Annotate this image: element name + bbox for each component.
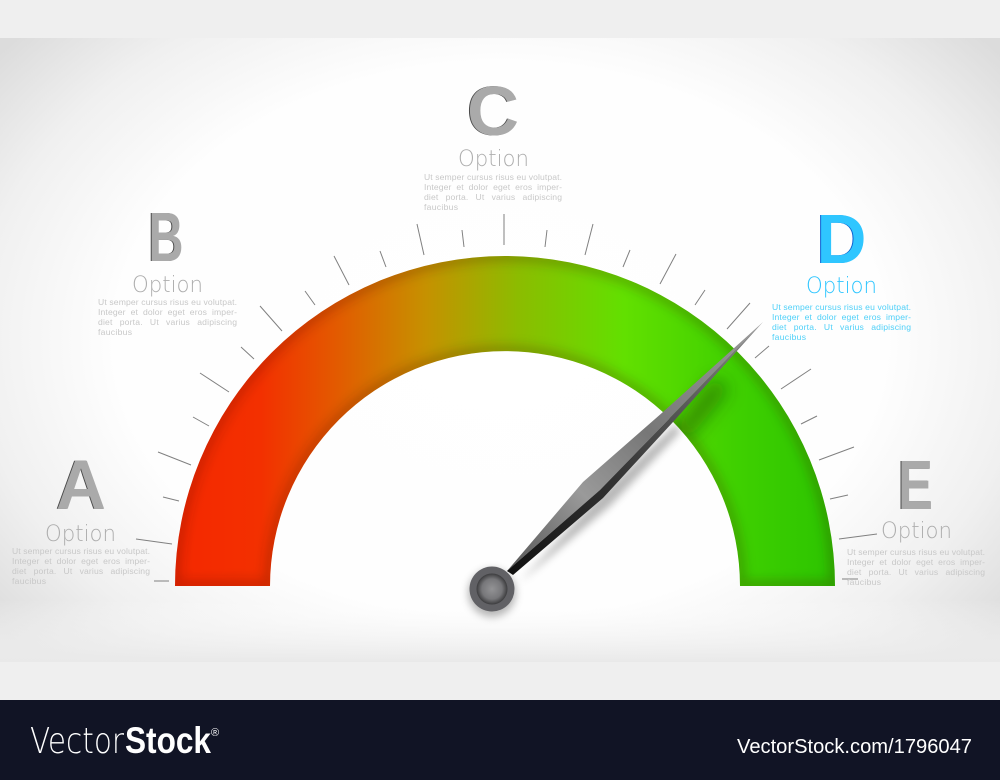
option E: Ut semper cursus risus eu volutpat. xyxy=(847,547,985,557)
option A: Ut semper cursus risus eu volutpat. xyxy=(12,546,150,556)
option B: Option xyxy=(132,273,203,298)
option B: Integer et dolor eget eros imper- xyxy=(98,307,237,317)
option D (highlighted): faucibus xyxy=(772,332,806,342)
option C: Ut semper cursus risus eu volutpat. xyxy=(424,172,562,182)
option A: A xyxy=(55,446,105,524)
option D (highlighted): diet porta. Ut varius adipiscing xyxy=(772,322,911,332)
option A: diet porta. Ut varius adipiscing xyxy=(12,566,150,576)
option D (highlighted) xyxy=(772,200,911,342)
option C: C xyxy=(467,72,519,150)
option E: Option xyxy=(881,519,952,544)
option A: Option xyxy=(45,522,116,547)
option E: Integer et dolor eget eros imper- xyxy=(847,557,985,567)
footer bar xyxy=(0,700,1000,780)
option E: faucibus xyxy=(847,577,881,587)
footer bar: ® xyxy=(211,727,219,739)
option B: B xyxy=(148,198,184,276)
option A: A xyxy=(56,446,106,524)
option B xyxy=(98,198,237,337)
footer bar: VectorStock.com/1796047 xyxy=(737,736,972,758)
option D (highlighted): Option xyxy=(806,274,877,299)
option D (highlighted): Integer et dolor eget eros imper- xyxy=(772,312,911,322)
option E: E xyxy=(898,446,933,524)
option C: faucibus xyxy=(424,202,458,212)
gauge tick marks xyxy=(136,214,877,581)
option D (highlighted): Ut semper cursus risus eu volutpat. xyxy=(772,302,911,312)
footer bar: Stock xyxy=(125,720,211,761)
option B: B xyxy=(148,198,182,276)
option A: faucibus xyxy=(12,576,46,586)
option C: Integer et dolor eget eros imper- xyxy=(424,182,562,192)
option C xyxy=(424,72,562,212)
option E: diet porta. Ut varius adipiscing xyxy=(847,567,985,577)
option A: Integer et dolor eget eros imper- xyxy=(12,556,150,566)
option C: diet porta. Ut varius adipiscing xyxy=(424,192,562,202)
option D (highlighted): D xyxy=(816,200,866,278)
footer bar: Vector xyxy=(30,721,124,762)
option D (highlighted): D xyxy=(816,200,866,278)
option B: Ut semper cursus risus eu volutpat. xyxy=(98,297,237,307)
option B: diet porta. Ut varius adipiscing xyxy=(98,317,237,327)
option B: faucibus xyxy=(98,327,132,337)
gauge arc: red to green band xyxy=(175,256,835,586)
option C: Option xyxy=(458,147,529,172)
needle hub xyxy=(468,566,516,617)
option C: C xyxy=(466,72,518,150)
option E xyxy=(847,446,985,587)
option E: E xyxy=(897,446,932,524)
gauge needle xyxy=(507,322,763,582)
option A xyxy=(12,446,150,586)
